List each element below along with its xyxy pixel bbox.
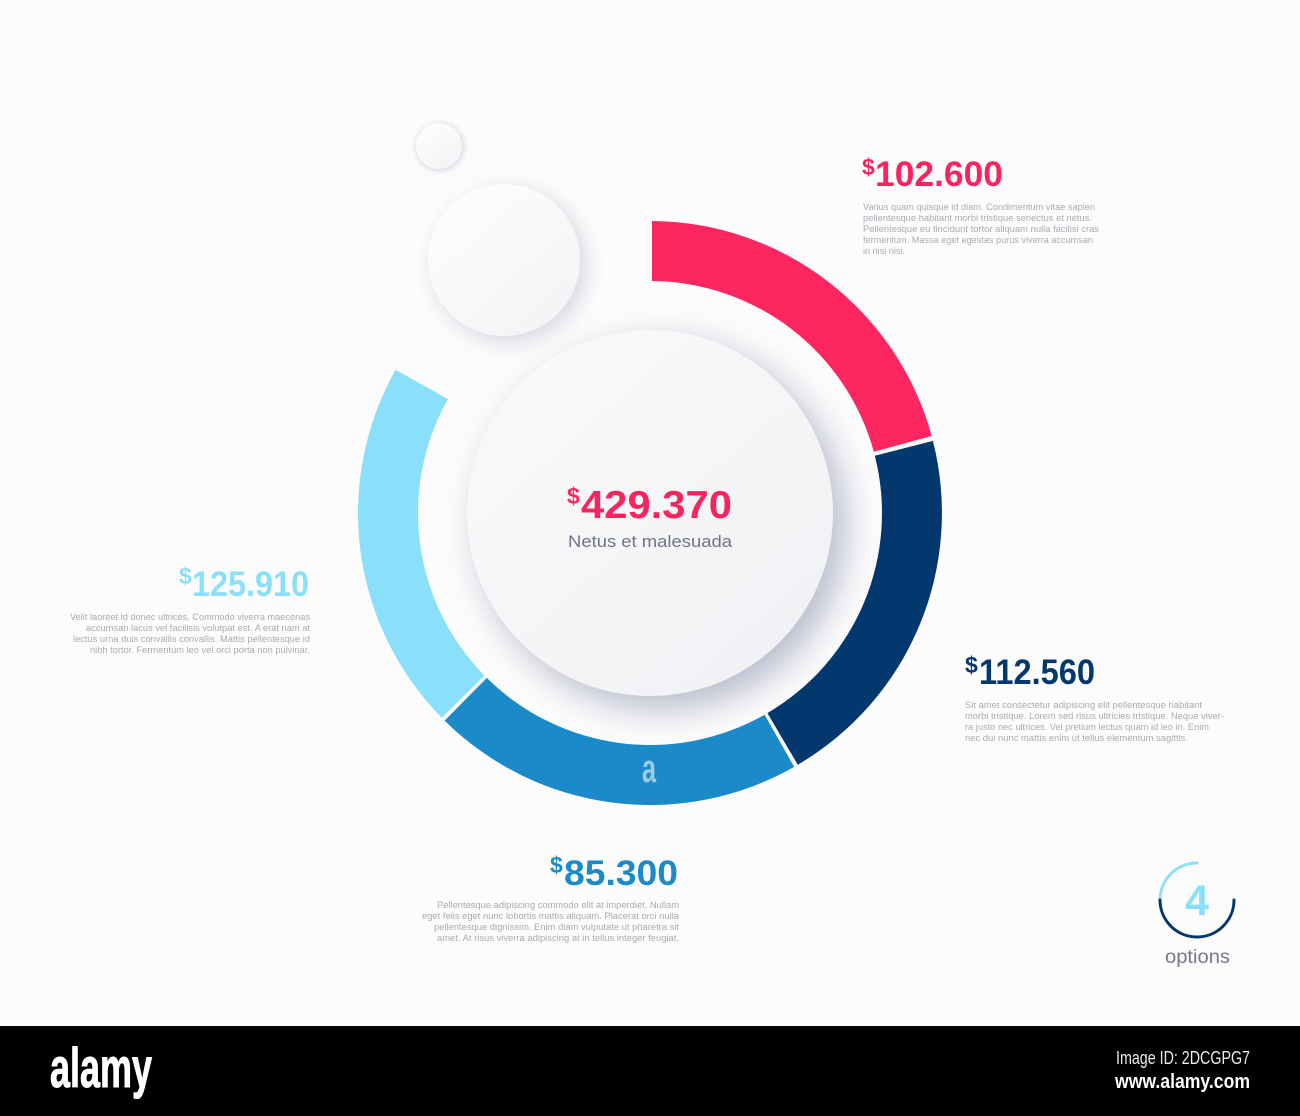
callout: 112.560 bbox=[965, 652, 1224, 744]
center total: $ bbox=[567, 483, 580, 509]
callout: 125.910: $ bbox=[179, 563, 192, 589]
center total bbox=[567, 483, 733, 551]
callout: 102.600: 102.600 bbox=[875, 155, 1003, 194]
callout: 112.560: ra justo nec ultrices. Vel pretium lectus quam id leo in. Enim bbox=[965, 722, 1209, 733]
callout: 102.600: Pellentesque eu tincidunt tortor aliquam nulla facilisi cras bbox=[863, 224, 1099, 235]
large decorative circle bbox=[428, 184, 586, 342]
callout: 85.300: amet. At risus viverra adipiscing at in tellus integer feugiat. bbox=[437, 933, 679, 944]
callout: 102.600: in nisi nisi. bbox=[863, 246, 905, 257]
callout: 125.910: lectus urna duis convallis convallis. Mattis pellentesque id bbox=[73, 634, 310, 645]
segment: blue 85.300 bbox=[445, 678, 794, 805]
center total: 429.370 bbox=[581, 484, 732, 527]
callout: 102.600: Varius quam quisque id diam. Condimentum vitae sapien bbox=[863, 202, 1095, 213]
small decorative circle bbox=[416, 123, 464, 171]
footer logo: alamy bbox=[50, 1036, 152, 1099]
callout: 125.910: Velit laoreet id donec ultrices. Commodo viverra maecenas bbox=[70, 612, 310, 623]
callout: 112.560: $ bbox=[965, 652, 978, 678]
callout: 112.560: morbi tristique. Lorem sed risus ultricies tristique. Neque viver- bbox=[965, 711, 1224, 722]
callout: 85.300: pellentesque dignissim. Enim diam vulputate ut pharetra sit bbox=[434, 922, 679, 933]
segment: navy 112.560 bbox=[767, 441, 942, 765]
callout: 85.300 bbox=[422, 852, 680, 944]
callout: 85.300: Pellentesque adipiscing commodo elit at imperdiet. Nullam bbox=[437, 900, 679, 911]
icon: light arc bbox=[1160, 863, 1197, 900]
site url: www.alamy.com bbox=[1114, 1071, 1250, 1093]
callout: 112.560: nec dui nunc mattis enim ut tellus elementum sagittis. bbox=[965, 733, 1188, 744]
donut chart bbox=[358, 221, 942, 805]
callout: 85.300: eget felis eget nunc lobortis mattis aliquam. Placerat orci nulla bbox=[422, 911, 680, 922]
segment: light blue 125.910 bbox=[358, 370, 484, 718]
callout: 125.910: accumsan lacus vel facilisis volutpat est. A erat nam at bbox=[86, 623, 310, 634]
callout: 125.910: 125.910 bbox=[192, 565, 309, 604]
image id: Image ID: 2DCGPG7 bbox=[1116, 1048, 1250, 1068]
options badge: 4 bbox=[1185, 877, 1209, 925]
center total: Netus et malesuada bbox=[568, 532, 733, 551]
watermark mark on blue segment: a bbox=[642, 747, 656, 791]
segment: red 102.600 bbox=[652, 221, 932, 452]
callout: 85.300: 85.300 bbox=[564, 854, 678, 893]
callout: 112.560: 112.560 bbox=[979, 653, 1095, 692]
callout: 85.300: $ bbox=[550, 852, 563, 878]
footer bar bbox=[0, 1026, 1300, 1116]
options badge: options bbox=[1165, 947, 1230, 968]
callout: 112.560: Sit amet consectetur adipiscing elit pellentesque habitant bbox=[965, 700, 1202, 711]
callout: 102.600: $ bbox=[862, 154, 875, 180]
icon: dark arc bbox=[1160, 900, 1234, 937]
center circle bbox=[467, 330, 833, 696]
callout: 125.910 bbox=[70, 563, 310, 656]
options badge bbox=[1160, 863, 1234, 968]
callout: 102.600: pellentesque habitant morbi tristique senectus et netus. bbox=[863, 213, 1092, 224]
callout: 125.910: nibh tortor. Fermentum leo vel orci porta non pulvinar. bbox=[90, 645, 310, 656]
callout: 102.600: fermentum. Massa eget egestas purus viverra accumsan bbox=[863, 235, 1093, 246]
center circle shadow bbox=[478, 342, 846, 710]
callout: 102.600 bbox=[862, 154, 1099, 257]
